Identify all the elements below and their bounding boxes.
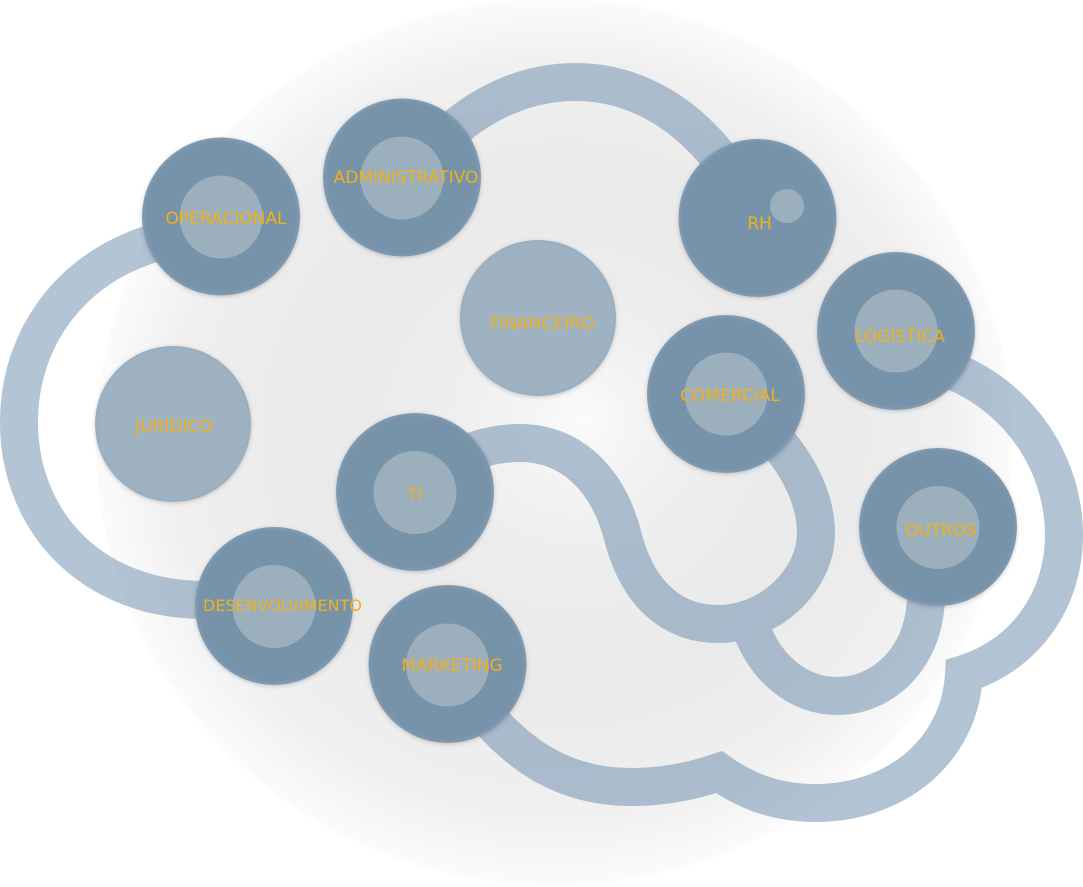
disc (142, 138, 300, 296)
node: desenvolvimento (195, 527, 362, 685)
disc (95, 346, 251, 502)
pipe: left lobe (19, 240, 205, 600)
node: ti (336, 413, 494, 571)
disc (336, 413, 494, 571)
label: OUTROS (905, 521, 977, 541)
inner disc (180, 176, 262, 258)
inner disc (896, 486, 980, 569)
pipe: top arc (450, 82, 725, 165)
disc (368, 585, 526, 743)
node: rh (678, 139, 836, 297)
label: TI (406, 485, 423, 505)
node: operacional (142, 138, 300, 296)
inner disc (684, 352, 768, 436)
pipe: right and bottom cloud outline (490, 368, 1064, 803)
label: RH (747, 214, 772, 234)
pipe: center wave and lower loop (470, 443, 926, 696)
small inner disc (770, 189, 804, 223)
disc (859, 448, 1017, 606)
disc (647, 315, 805, 473)
inner disc (360, 136, 444, 220)
label: JURÍDICO (134, 415, 213, 437)
inner disc (374, 451, 456, 534)
node: outros (859, 448, 1017, 606)
disc (323, 98, 481, 256)
disc (460, 240, 616, 396)
node: comercial (647, 315, 805, 473)
label: COMERCIAL (680, 386, 780, 406)
disc (195, 527, 353, 685)
node: marketing (368, 585, 526, 743)
inner disc (406, 624, 489, 706)
node: administrativo (323, 98, 481, 256)
connector pipes (19, 82, 1064, 803)
inner disc (854, 290, 938, 372)
label: DESENVOLVIMENTO (203, 596, 362, 615)
label: MARKETING (401, 656, 503, 676)
label: LOGÍSTICA (855, 325, 945, 347)
disc (678, 139, 836, 297)
label: ADMINISTRATIVO (334, 168, 478, 188)
node: jurídico (95, 346, 251, 502)
label: FINANCEIRO (490, 314, 594, 334)
disc (817, 252, 975, 410)
node: logística (817, 252, 975, 410)
inner disc (232, 565, 316, 648)
label: OPERACIONAL (166, 209, 287, 229)
node: financeiro (460, 240, 616, 396)
